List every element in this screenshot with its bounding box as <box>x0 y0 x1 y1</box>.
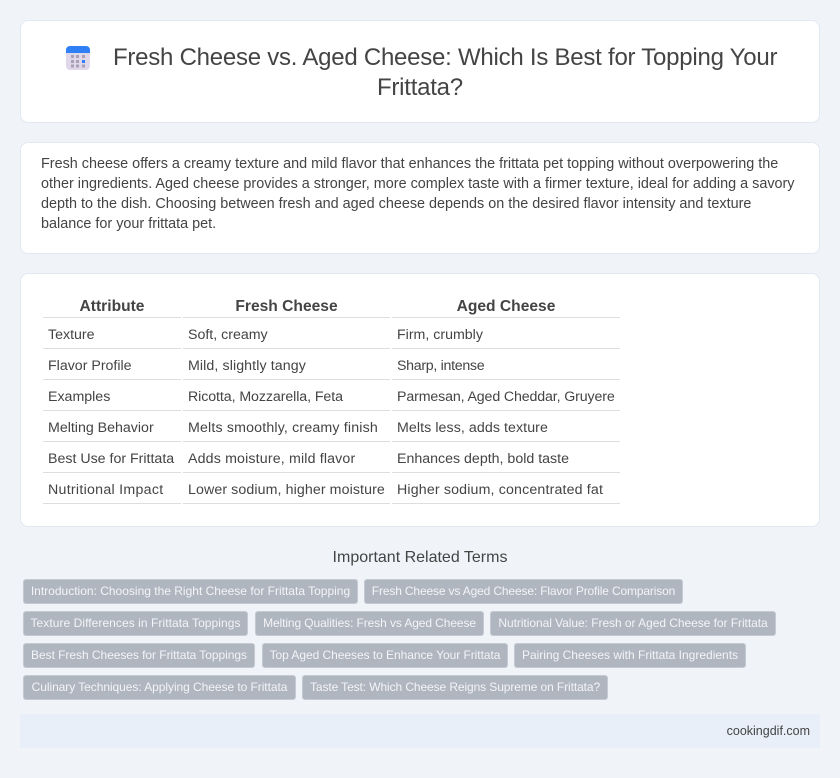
tag <box>262 643 508 668</box>
tag: Taste Test: Which Cheese Reigns Supreme on Frittata? <box>310 680 600 694</box>
row: texture: Soft, creamy <box>188 327 268 343</box>
tag <box>23 643 255 668</box>
title: Fresh Cheese vs. Aged Cheese: Which Is Best for Topping Your <box>113 44 777 71</box>
row: best use: Best Use for Frittata <box>48 451 174 467</box>
tag: Introduction: Choosing the Right Cheese for Frittata Topping <box>31 584 350 598</box>
row: nutritional impact: Nutritional Impact <box>48 482 163 498</box>
row: nutritional impact: Higher sodium, concentrated fat <box>397 482 603 498</box>
tag: Melting Qualities: Fresh vs Aged Cheese <box>263 616 476 630</box>
header row: Aged Cheese <box>457 298 555 315</box>
row: texture: Texture <box>48 327 95 343</box>
tag: Texture Differences in Frittata Toppings <box>30 616 241 630</box>
tag <box>23 611 248 636</box>
footer bar <box>20 714 820 748</box>
row: examples: Ricotta, Mozzarella, Feta <box>188 389 343 405</box>
panel: title header <box>20 20 820 123</box>
tag group: related terms <box>23 579 776 700</box>
tag: Top Aged Cheeses to Enhance Your Frittata <box>270 648 500 662</box>
title: Frittata? <box>377 74 463 101</box>
row: flavor profile: Flavor Profile <box>48 358 132 374</box>
tag <box>364 579 683 604</box>
row: nutritional impact: Lower sodium, higher moisture <box>188 482 385 498</box>
tag <box>490 611 776 636</box>
tag: Culinary Techniques: Applying Cheese to Frittata <box>32 680 287 694</box>
header row: Attribute <box>80 298 144 315</box>
row: best use: Adds moisture, mild flavor <box>188 451 355 467</box>
header row: Fresh Cheese <box>235 298 338 315</box>
icon: calendar <box>66 46 90 70</box>
row: texture <box>43 327 620 349</box>
row: best use: Enhances depth, bold taste <box>397 451 569 467</box>
intro text: other ingredients. Aged cheese provides a stronger, more complex taste with a firmer texture, ideal for adding a savory <box>41 176 795 192</box>
row: melting behavior: Melts smoothly, creamy finish <box>188 420 378 436</box>
intro text <box>41 156 795 232</box>
tag <box>23 579 358 604</box>
row: examples: Examples <box>48 389 110 405</box>
row: examples: Parmesan, Aged Cheddar, Gruyere <box>397 389 615 405</box>
intro text: depth to the dish. Choosing between fresh and aged cheese depends on the desired flavor intensity and texture <box>41 196 751 212</box>
row: nutritional impact <box>43 482 620 504</box>
footer source text: cookingdif.com <box>727 724 810 738</box>
tag <box>23 675 296 700</box>
row: flavor profile: Mild, slightly tangy <box>188 358 306 374</box>
tag <box>514 643 746 668</box>
heading: related terms: Important Related Terms <box>333 549 507 566</box>
row: melting behavior <box>43 420 620 442</box>
tag: Nutritional Value: Fresh or Aged Cheese for Frittata <box>498 616 768 630</box>
intro text: balance for your frittata pet. <box>41 216 216 232</box>
panel: introduction <box>20 142 820 254</box>
title <box>113 44 778 101</box>
row: texture: Firm, crumbly <box>397 327 483 343</box>
tag: Fresh Cheese vs Aged Cheese: Flavor Profile Comparison <box>372 584 675 598</box>
tag: Pairing Cheeses with Frittata Ingredients <box>522 648 738 662</box>
row: flavor profile: Sharp, intense <box>397 358 484 374</box>
row: examples <box>43 389 620 411</box>
row: flavor profile <box>43 358 620 380</box>
row: melting behavior: Melting Behavior <box>48 420 154 436</box>
intro text: Fresh cheese offers a creamy texture and mild flavor that enhances the frittata pet topping without overpowering the <box>41 156 778 172</box>
tag <box>255 611 484 636</box>
header row <box>43 298 620 318</box>
tag <box>302 675 608 700</box>
comparison table <box>43 298 620 504</box>
tag: Best Fresh Cheeses for Frittata Toppings <box>31 648 247 662</box>
panel: comparison table <box>20 273 820 527</box>
row: best use <box>43 451 620 473</box>
row: melting behavior: Melts less, adds texture <box>397 420 548 436</box>
